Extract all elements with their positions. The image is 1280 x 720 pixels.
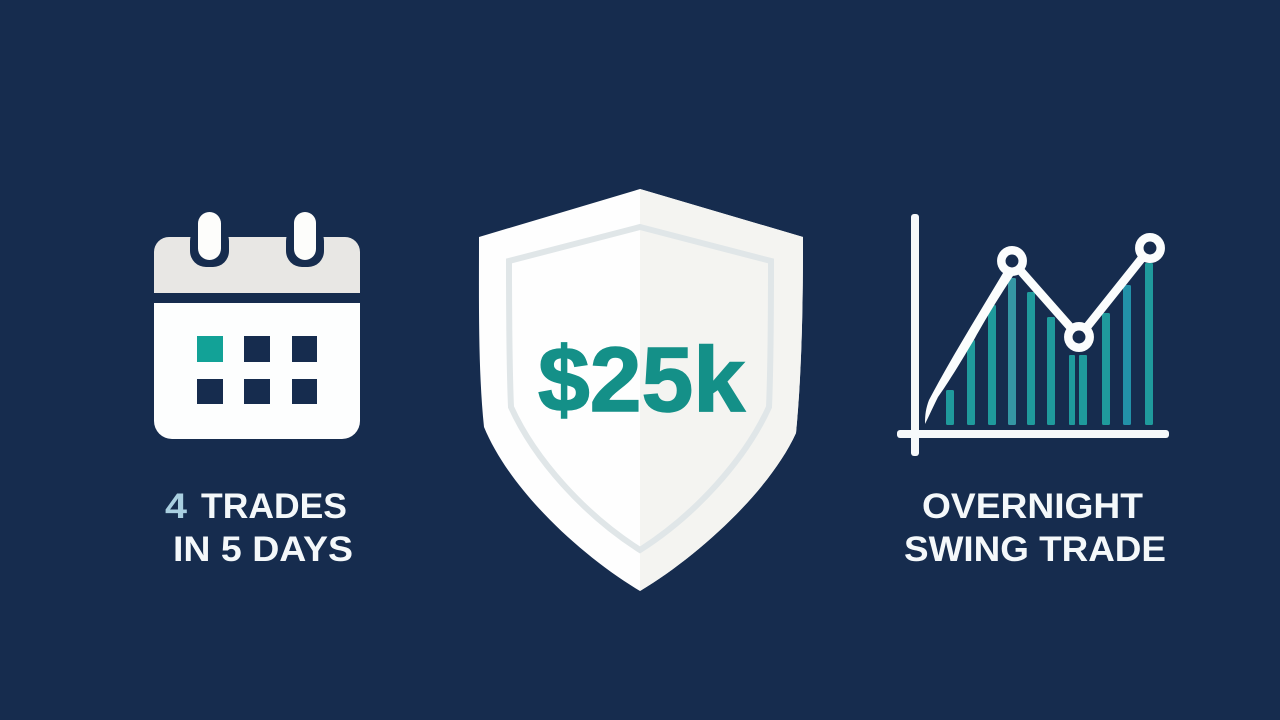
label: overnight swing trade: OVERNIGHT <box>922 487 1143 526</box>
label: 4 trades in 5 days <box>165 487 353 569</box>
shield value: $25k <box>538 329 746 431</box>
label: overnight swing trade <box>904 487 1166 569</box>
icon: calendar <box>154 212 360 439</box>
icon: shield <box>479 189 803 591</box>
chart bars <box>946 263 1153 425</box>
label: overnight swing trade: SWING TRADE <box>904 530 1166 569</box>
label: 4 trades in 5 days: 4 <box>165 487 188 526</box>
chart points <box>1001 237 1161 348</box>
icon: line and bar chart <box>897 214 1169 456</box>
label: 4 trades in 5 days: IN 5 DAYS <box>173 530 353 569</box>
chart trend line <box>925 268 1015 424</box>
chart axes <box>911 214 919 456</box>
label: 4 trades in 5 days: TRADES <box>201 487 347 526</box>
